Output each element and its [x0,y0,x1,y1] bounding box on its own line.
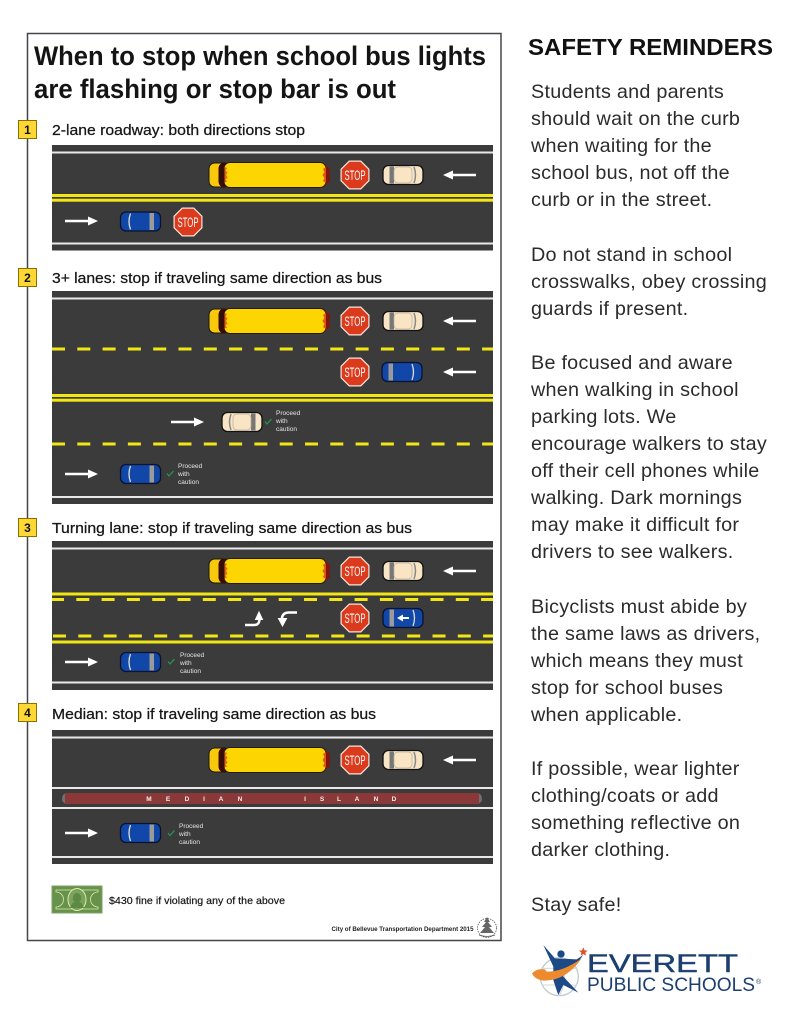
proceed with caution note [265,410,301,433]
paragraph: bicyclists: which means they must [530,650,743,672]
stop sign [340,306,370,336]
arrow [65,658,98,666]
heading: safety reminders: SAFETY REMINDERS [528,34,773,60]
section 4 heading: Median: stop if traveling same direction as bus [52,706,376,723]
paragraph: parking lots: when walking in school [530,379,739,401]
road diagram 1 [52,145,493,250]
proceed with caution note: caution [276,426,297,433]
turning car [383,608,423,628]
fine text: $430 fine if violating any of the above [109,895,285,907]
paragraph: bicyclists: stop for school buses [531,677,723,699]
icon: dollar bill [52,886,102,913]
paragraph: parking lots: may make it difficult for [531,514,739,536]
paragraph: bicyclists [530,596,760,726]
stop sign: STOP [344,564,366,579]
proceed with caution note [167,463,203,486]
school bus [209,748,330,772]
title: When to stop when school bus lights [34,41,486,71]
proceeding car [222,412,262,432]
proceed with caution note: caution [179,839,200,846]
paragraph: crosswalks [531,244,767,320]
proceed with caution note: with [178,831,191,838]
proceeding car [120,464,160,484]
stopped car [382,362,422,382]
stop sign [340,746,370,774]
proceed with caution note: with [177,471,190,478]
stopped car [383,750,423,770]
stop sign: STOP [344,365,366,380]
paragraph: crosswalks: Do not stand in school [531,244,732,266]
paragraph: parking lots: off their cell phones while [531,460,760,482]
section 3 heading: 3 [24,521,31,535]
title: are flashing or stop bar is out [34,74,396,104]
paragraph: parking lots: encourage walkers to stay [531,433,767,455]
school bus [209,162,330,188]
stop sign: STOP [344,168,366,183]
road diagram 3 [52,541,493,690]
panel: when to stop [18,34,501,940]
stop sign [340,556,370,586]
stop sign: STOP [178,215,198,230]
proceed with caution note: Proceed [180,652,205,659]
school bus [209,308,330,334]
text block: reminders [530,81,767,916]
proceed with caution note: Proceed [276,410,301,417]
paragraph: clothing [531,758,740,861]
proceed with caution note: Proceed [179,823,204,830]
arrow [443,368,476,376]
paragraph: wait on curb: should wait on the curb [531,108,740,130]
icon: city seal [478,917,496,938]
logo: Everett Public Schools: EVERETT [587,950,738,978]
section 4 heading: 4 [24,706,31,720]
logo: Everett Public Schools: ® [756,978,762,986]
paragraph: parking lots: parking lots. We [531,406,676,428]
paragraph: parking lots: walking. Dark mornings [530,487,742,509]
paragraph: clothing: something reflective on [531,812,740,834]
stop sign [340,604,370,632]
paragraph: wait on curb: when waiting for the [530,135,712,157]
paragraph: wait on curb: school bus, not off the [531,162,730,184]
stop sign: STOP [344,611,366,626]
title [34,41,486,104]
arrow [65,216,98,226]
paragraph: clothing: If possible, wear lighter [531,758,740,780]
credit: City of Bellevue Transportation Department 2015 [332,926,474,933]
paragraph: bicyclists: the same laws as drivers, [531,623,760,645]
stop sign: STOP [344,314,366,329]
proceed with caution note [168,652,205,675]
paragraph: wait on curb: Students and parents [531,81,724,103]
arrow [171,418,204,426]
proceed with caution note: caution [180,668,201,675]
paragraph: parking lots: Be focused and aware [531,352,733,374]
paragraph: crosswalks: guards if present. [531,298,688,320]
proceed with caution note [168,823,204,846]
stopped car [383,312,423,330]
stopped car [383,562,423,580]
proceeding car [120,652,160,672]
arrow [65,470,98,478]
proceeding car [120,824,160,842]
school bus [209,558,330,584]
logo: Everett Public Schools: PUBLIC SCHOOLS [587,975,755,996]
arrow [65,828,98,838]
closing line: Stay safe! [531,894,621,916]
paragraph: bicyclists: when applicable. [530,704,682,726]
arrow [443,566,476,576]
paragraph: parking lots [530,352,767,563]
section 1 heading: 1 [24,123,31,137]
arrow [443,756,476,764]
logo mark [532,945,588,996]
paragraph: parking lots: drivers to see walkers. [531,541,734,563]
stop sign [174,208,202,236]
paragraph: clothing: darker clothing. [531,839,670,861]
median island: ISLAND [304,796,397,803]
stop sign [340,160,370,190]
paragraph: wait on curb: curb or in the street. [531,189,712,211]
median island [62,793,482,804]
median island: MEDIAN [146,796,243,803]
section 1 heading: 2-lane roadway: both directions stop [52,122,305,139]
section 2 heading: 2 [24,271,31,285]
paragraph: crosswalks: crosswalks, obey crossing [531,271,767,293]
section 2 heading: 3+ lanes: stop if traveling same direction as bus [52,270,382,287]
stop sign [340,358,370,386]
paragraph: clothing: clothing/coats or add [531,785,719,807]
road diagram 4 [52,730,493,864]
road diagram 2 [52,291,493,504]
proceed with caution note: Proceed [178,463,203,470]
paragraph: bicyclists: Bicyclists must abide by [531,596,747,618]
arrow [443,170,476,180]
logo: Everett Public Schools [532,945,762,996]
proceed with caution note: with [275,418,288,425]
arrow [443,316,476,326]
turn arrows [245,612,297,626]
paragraph: wait on curb [530,81,740,211]
proceed with caution note: with [179,660,192,667]
stopped car [120,212,160,231]
stop sign: STOP [344,753,366,768]
stopped car [383,166,423,184]
proceed with caution note: caution [178,479,199,486]
section 3 heading: Turning lane: stop if traveling same direction as bus [52,520,412,537]
